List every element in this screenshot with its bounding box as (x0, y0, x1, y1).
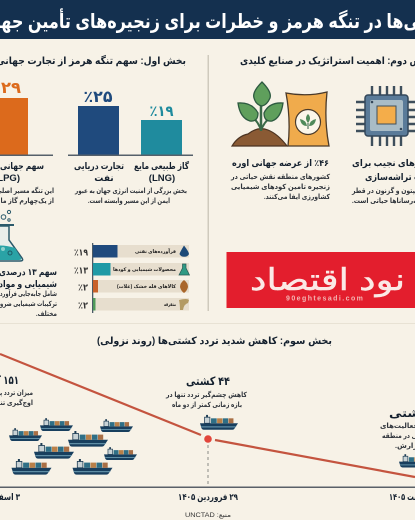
text block: urea supply: کشورهای منطقه نقش حیاتی در (230, 173, 331, 181)
logo: 90eghtesadi (226, 252, 415, 308)
data point: 44 ships (204, 435, 212, 443)
icon: single ship at 44 (200, 415, 238, 430)
row: other 2%: متفرقه (164, 302, 176, 308)
fleet of ships (9, 418, 137, 475)
callout: 44 ships (165, 376, 248, 409)
bar chart: Hormuz shares (0, 80, 193, 156)
row: chemicals and fertilizers 13%: محصولات شیمیایی و کودها (113, 267, 176, 273)
source note: منبع: UNCTAD (185, 512, 231, 519)
axis date: middle: ۲۹ فروردین ۱۴۰۵ (178, 492, 238, 503)
text block: urea supply (230, 158, 331, 201)
text block: energy security note: ایمن از این مسیر وابسته است. (88, 198, 170, 205)
logo: 90eghtesadi: نود اقتصاد (250, 264, 405, 297)
heading: section one: بخش اول: سهم تنگه هرمز از تجارت جهانی (0, 54, 186, 67)
text block: petrochemicals share: سهم ۱۳ درصدی (0, 267, 57, 278)
logo: 90eghtesadi: 90eghtesadi.com (286, 296, 364, 302)
bar label: oil shipping: نفت (94, 173, 114, 183)
icon: fertilizer sack (286, 92, 329, 146)
callout: 44 ships: بازه زمانی کمتر از دو ماه (172, 401, 242, 409)
row: dry bulk 2%: ٪۲ (78, 282, 88, 294)
row: chemicals and fertilizers 13%: ٪۱۳ (74, 266, 88, 276)
text block: petrochemicals share (0, 267, 57, 318)
line chart: traffic decline (0, 354, 415, 488)
row: other 2%: ٪۲ (78, 300, 88, 312)
bar label: LPG (0, 161, 44, 184)
bar label: oil shipping: تجارت دریایی (74, 161, 124, 172)
row: oil products 19%: ٪۱۹ (74, 248, 88, 258)
row: oil products 19% (74, 245, 189, 258)
panel: section one, Hormuz share of world trade (0, 54, 193, 318)
row: other 2% (78, 298, 189, 312)
header title band (0, 0, 415, 39)
panel: section three, shipping traffic decline (0, 336, 415, 519)
row: dry bulk 2% (78, 280, 189, 294)
text block: petrochemicals share: مختلف. (36, 311, 57, 318)
callout: 44 ships: کاهش چشم‌گیر تردد تنها در (165, 390, 248, 399)
bar label: LNG: (LNG) (149, 173, 175, 184)
text block: energy security note: بخش بزرگی از امنیت انرژی جهان به عبور (74, 186, 187, 195)
row: oil products 19%: فرآورده‌های نفتی (135, 247, 176, 255)
row: dry bulk 2%: کالاهای فله خشک (غلات) (117, 284, 176, 290)
icon: single ship at end (399, 454, 415, 467)
text block: urea supply: ٪۴۶ از عرضه جهانی اوره (232, 158, 329, 169)
text block: noble gases for chips (351, 157, 415, 205)
callout: 151 ships (0, 375, 33, 407)
bar label: LNG (134, 160, 190, 184)
icon: chemistry flask (0, 210, 23, 261)
panel: section two, strategic importance in key industries (226, 56, 415, 308)
text block: urea supply: زنجیره تامین کودهای شیمیایی (231, 183, 330, 191)
row: chemicals and fertilizers 13% (74, 263, 190, 276)
bar label: LNG: گاز طبیعی مایع (134, 160, 190, 172)
text block: petrochemicals share: شیمیایی و مواد (0, 279, 57, 290)
icon: microchip (356, 86, 415, 146)
text block: energy security note (74, 186, 187, 205)
chart: horizontal cargo share bars (74, 243, 190, 313)
bar chart: Hormuz shares: ٪۲۵ (84, 89, 113, 106)
bar chart: Hormuz shares: ٪۱۹ (150, 103, 174, 120)
text block: urea supply: کشاورزی ایفا می‌کنند. (264, 193, 331, 201)
bar label: oil shipping (74, 161, 124, 183)
callout: final ships count (380, 408, 415, 450)
heading: section three: بخش سوم: کاهش شدید تردد کشتی‌ها (روند نزولی) (97, 336, 332, 347)
text block: LPG note (0, 186, 54, 205)
callout: 44 ships: ۴۴ کشتی (186, 376, 230, 388)
icon: plant in soil (232, 82, 287, 146)
bar label: LPG: سهم جهانی (0, 161, 44, 172)
